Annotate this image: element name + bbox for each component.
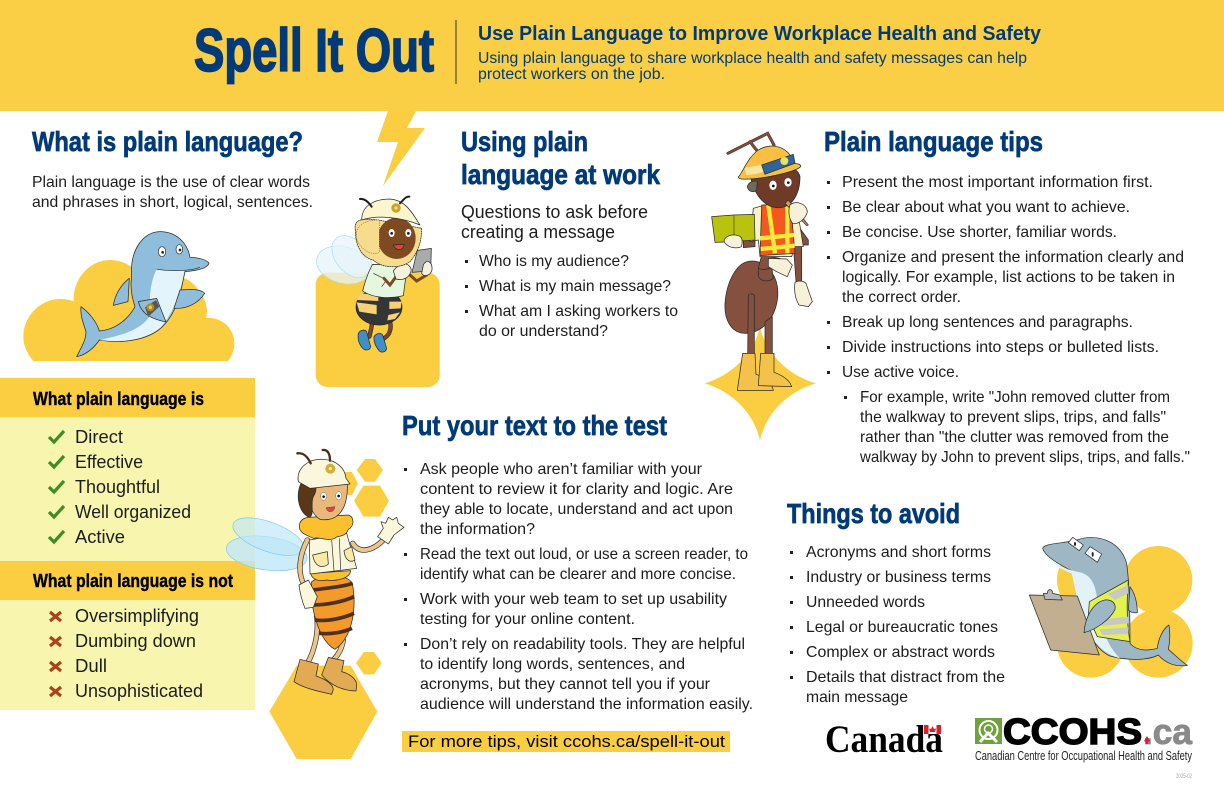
list: what plain language is not: Oversimplifying	[75, 606, 199, 626]
bullet list: questions	[465, 253, 678, 340]
icon: ant worker with notebook on star	[705, 133, 816, 441]
bullet list: tips: rather than "the clutter was removed from the	[860, 429, 1169, 446]
heading: Plain language tips	[824, 126, 1043, 157]
bullet list: tests: Don’t rely on readability tools. They are helpful	[420, 636, 745, 653]
bullet list: tips: the walkway to prevent slips, trips, and falls"	[860, 409, 1166, 426]
bullet list: things to avoid: main message	[806, 689, 908, 706]
bullet list: tips: the correct order.	[842, 289, 961, 306]
bullet list: tests: to identify long words, sentences, and	[420, 656, 685, 673]
heading band: what plain language is not	[0, 561, 255, 600]
list: what plain language is: Effective	[75, 452, 143, 472]
panel: plain language tips	[824, 126, 1190, 466]
callout: more tips link: For more tips, visit ccohs.ca/spell-it-out	[408, 732, 725, 751]
bullet list: tips: walkway by John to prevent slips, trips, and falls."	[859, 449, 1190, 466]
bullet list: tests: Read the text out loud, or use a screen reader, to	[420, 546, 748, 563]
bullet list: questions: do or understand?	[479, 323, 608, 340]
icon: bee with smartphone on yellow panel	[312, 197, 440, 387]
panel: what is plain language	[23, 126, 313, 361]
panel: using plain language at work	[461, 126, 678, 340]
bullet list: tests	[404, 461, 753, 713]
logo: CCOHS: CCOHS	[1003, 711, 1142, 752]
bullet list: tips: Use active voice.	[842, 364, 959, 381]
header intro text: Using plain language to share workplace health and safety messages can help	[478, 50, 1027, 67]
bullet list: tests: identify what can be clearer and more concise.	[420, 566, 736, 583]
bullet list: things to avoid: Details that distract from the	[806, 669, 1005, 686]
bullet list: tests: audience will understand the information easily.	[420, 696, 753, 713]
definition text: and phrases in short, logical, sentences.	[32, 194, 313, 211]
list: what plain language is: Direct	[75, 427, 123, 447]
heading: What is plain language?	[32, 126, 303, 157]
bullet list: tests: acronyms, but they cannot tell you if your	[420, 676, 711, 693]
heading band: what plain language is: What plain language is	[33, 388, 204, 409]
list: what plain language is: Well organized	[75, 502, 191, 522]
icon: dolphin with clipboard and safety vest	[1029, 537, 1193, 678]
heading	[461, 126, 660, 190]
bullet list: tests: testing for your online content.	[420, 611, 635, 628]
list: what plain language is not: Unsophisticated	[75, 681, 203, 701]
logo: CCOHS: .ca	[1143, 711, 1193, 752]
bullet list: things to avoid: Unneeded words	[806, 594, 925, 611]
version code: 2025-02	[1176, 774, 1192, 780]
definition text	[32, 174, 313, 211]
bullet list: things to avoid: Industry or business terms	[806, 569, 991, 586]
logo: Canada wordmark: Canada	[825, 718, 943, 761]
bullet list: tests: content to review it for clarity and logic. Are	[420, 481, 733, 498]
heading band: what plain language is	[0, 378, 255, 417]
header intro text	[478, 50, 1027, 83]
bullet list: tips: Be clear about what you want to achieve.	[842, 199, 1130, 216]
heading: language at work	[461, 159, 660, 190]
bullet list: tips: Divide instructions into steps or bulleted lists.	[842, 339, 1159, 356]
bullet list: tests: Work with your web team to set up usability	[420, 591, 727, 608]
bullet list: tips: Break up long sentences and paragraphs.	[842, 314, 1133, 331]
bullet list: things to avoid	[790, 544, 1005, 706]
bullet list: things to avoid: Acronyms and short forms	[806, 544, 991, 561]
header banner	[0, 0, 1224, 111]
bullet list: tips: For example, write "John removed clutter from	[860, 389, 1170, 406]
panel: what plain language is / is not	[0, 378, 255, 710]
bullet list: tips: Present the most important information first.	[842, 174, 1153, 191]
heading: Using plain	[461, 126, 588, 157]
icon: dolphin on yellow cloud	[23, 232, 234, 361]
icon: lightning bolt	[377, 111, 425, 186]
bullet list: questions: What is my main message?	[479, 278, 671, 295]
title: Spell It Out	[194, 17, 434, 84]
list: what plain language is: Thoughtful	[75, 477, 160, 497]
bullet list: things to avoid: Legal or bureaucratic tones	[806, 619, 998, 636]
bullet list: things to avoid: Complex or abstract words	[806, 644, 995, 661]
bullet list: tests: Ask people who aren’t familiar with your	[420, 461, 703, 478]
bullet list: questions: Who is my audience?	[479, 253, 629, 270]
icon: bee in vest on hexagons	[224, 450, 404, 759]
heading: Things to avoid	[787, 498, 960, 529]
bullet list: tests: they able to locate, understand and act upon	[420, 501, 733, 518]
icon: CCOHS green emblem	[975, 718, 1002, 744]
subheading: creating a message	[461, 222, 615, 242]
list: what plain language is not: Dumbing down	[75, 631, 196, 651]
logo: CCOHS	[975, 711, 1193, 763]
header intro text: protect workers on the job.	[478, 66, 665, 83]
definition text: Plain language is the use of clear words	[32, 174, 310, 191]
list: what plain language is not	[50, 606, 203, 701]
panel: things to avoid	[787, 498, 1005, 706]
bullet list: tips: logically. For example, list actions to be taken in	[842, 269, 1175, 286]
panel: put your text to the test	[402, 410, 753, 752]
list: what plain language is	[49, 427, 191, 547]
bullet list: questions: What am I asking workers to	[479, 303, 678, 320]
subheading	[461, 202, 648, 242]
list: what plain language is: Active	[75, 527, 125, 547]
subtitle: Use Plain Language to Improve Workplace Health and Safety	[478, 23, 1042, 45]
bullet list: tips: Organize and present the information clearly and	[842, 249, 1184, 266]
bullet list: tips: Be concise. Use shorter, familiar words.	[842, 224, 1117, 241]
heading: Put your text to the test	[402, 410, 667, 441]
list: what plain language is not: Dull	[75, 656, 107, 676]
subheading: Questions to ask before	[461, 202, 648, 222]
bullet list: tips	[827, 174, 1190, 466]
bullet list: tests: the information?	[420, 521, 535, 538]
heading band: what plain language is not: What plain language is not	[33, 570, 233, 591]
